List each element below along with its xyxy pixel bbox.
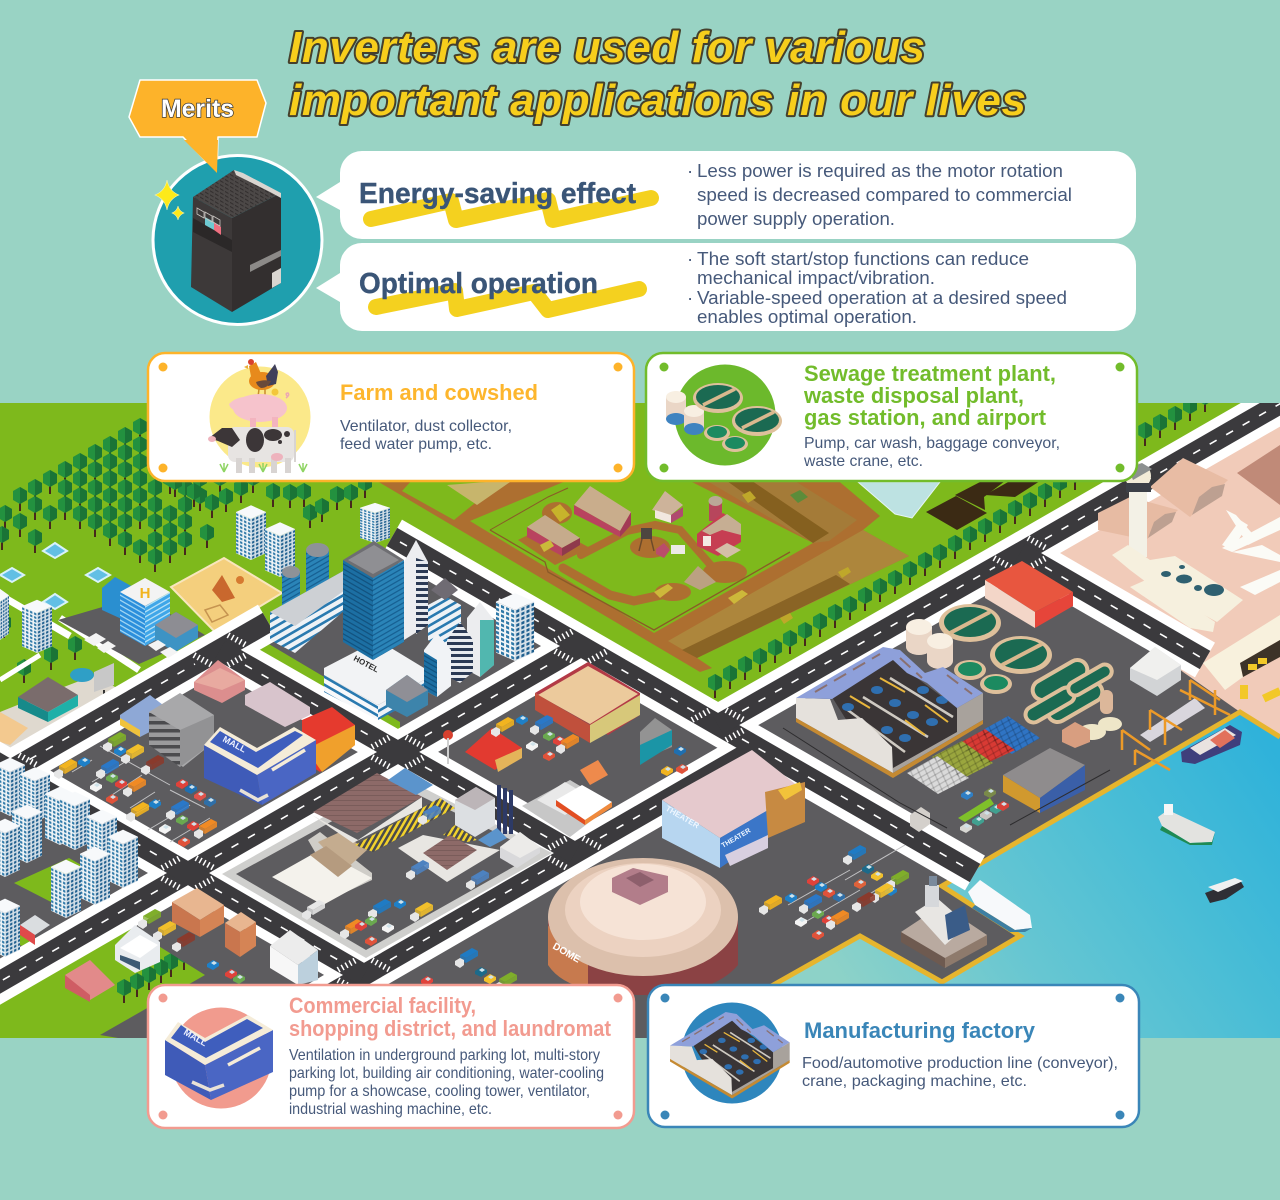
apartment towers <box>0 503 390 653</box>
teal tower <box>467 602 494 677</box>
sign <box>94 663 114 694</box>
small tanks <box>1062 690 1122 748</box>
merit panel: optimal operation: · <box>687 287 693 308</box>
theater: THEATER <box>720 827 752 850</box>
sea <box>780 715 1280 1038</box>
vehicles <box>491 717 514 737</box>
office <box>455 787 495 837</box>
dome: DOME <box>550 941 582 966</box>
grass lawn <box>14 858 80 902</box>
card: commercial facility: pump for a showcase, cooling tower, ventilator, <box>289 1083 590 1100</box>
card: sewage treatment plant <box>646 353 1137 481</box>
red building <box>985 561 1073 628</box>
playground <box>171 558 282 633</box>
port pier <box>1203 615 1280 702</box>
merit panel: optimal operation: Variable-speed operation at a desired speed <box>697 287 1067 308</box>
card: commercial facility: industrial washing machine, etc. <box>289 1101 492 1118</box>
merit panel: energy-saving effect: power supply operation. <box>697 208 895 229</box>
icon: settling tanks <box>666 383 782 452</box>
card: commercial facility: shopping district, and laundromat <box>289 1016 612 1041</box>
warehouse block <box>222 768 552 958</box>
cargo ship <box>1158 804 1215 845</box>
mall <box>204 727 316 805</box>
card: sewage treatment plant: Sewage treatment plant, <box>804 361 1056 386</box>
floor and shelves <box>272 832 372 905</box>
gantry cranes and container stacks <box>1122 680 1230 770</box>
restaurant <box>535 662 640 743</box>
red service station <box>465 728 522 772</box>
inverter emblem <box>153 140 322 324</box>
card: commercial facility: Commercial facility, <box>289 993 476 1018</box>
card: farm and cowshed: feed water pump, etc. <box>340 436 492 453</box>
small annex <box>478 828 540 868</box>
dark striped tower <box>447 622 473 683</box>
icon: grass <box>220 463 307 472</box>
icon: inverter <box>191 170 281 312</box>
downtown skyline <box>270 540 534 720</box>
title: important applications in our lives <box>289 76 1026 125</box>
settling tanks <box>939 604 1001 642</box>
ground: grass <box>0 403 1280 1038</box>
podium with hotel <box>324 648 424 720</box>
card: manufacturing factory: crane, packaging machine, etc. <box>802 1073 1027 1090</box>
merit panel: optimal operation: enables optimal operation. <box>697 306 917 327</box>
title <box>289 23 1026 125</box>
mall: MALL <box>221 734 248 755</box>
sewage plant <box>783 561 1230 833</box>
card: commercial facility: parking lot, building air conditioning, water-cooling <box>289 1065 604 1082</box>
barn 2 <box>527 515 580 556</box>
shop right <box>640 718 672 765</box>
bottom-left buildings <box>20 888 318 1002</box>
grey warehouse <box>1003 748 1085 813</box>
dome lot vehicles <box>421 845 909 992</box>
vehicles: mall lot <box>54 732 217 847</box>
vehicles <box>368 899 391 919</box>
hatched bay <box>355 798 477 852</box>
mall block buildings <box>120 660 355 805</box>
stacks <box>497 785 513 834</box>
gatehouse and parked cars <box>910 788 1009 833</box>
card: commercial facility <box>148 985 634 1128</box>
gas station block <box>443 662 688 837</box>
park shop <box>18 677 78 722</box>
merit panel: energy-saving effect: · <box>687 160 693 181</box>
airport apron <box>1060 426 1280 734</box>
merits badge <box>129 80 266 173</box>
white clinic <box>270 930 318 985</box>
port edge <box>770 709 1280 984</box>
container ship <box>1181 725 1242 764</box>
crosswalks <box>19 538 1046 990</box>
water tower <box>639 528 654 551</box>
tree rows <box>0 388 1212 1003</box>
hotel sign: HOTEL <box>352 654 380 675</box>
red shop <box>302 707 355 772</box>
hangars <box>1098 458 1228 540</box>
car stacks <box>907 716 1040 794</box>
title: Inverters are used for various <box>289 23 925 72</box>
icon: sparkles <box>155 180 184 220</box>
airplanes <box>1222 510 1280 595</box>
trucks <box>406 860 429 880</box>
hospital <box>84 577 198 658</box>
theater: THEATER <box>664 804 701 830</box>
cruise ship <box>968 880 1032 932</box>
icon: cow <box>208 427 296 473</box>
main blue tower <box>343 541 404 660</box>
merit panel: optimal operation: · <box>687 248 693 269</box>
park paths and fountains <box>0 543 139 760</box>
tail re-cover <box>184 140 218 173</box>
parking garage <box>149 693 214 767</box>
dome <box>548 858 738 995</box>
low steel building <box>386 675 428 717</box>
oxidation tanks <box>1023 656 1114 726</box>
card: farm and cowshed <box>148 353 634 481</box>
card: sewage treatment plant: Pump, car wash, baggage conveyor, <box>804 435 1060 452</box>
silo <box>708 496 722 521</box>
merit panel: optimal operation <box>316 243 1136 331</box>
card: commercial facility: Ventilation in underground parking lot, multi-story <box>289 1047 600 1064</box>
pink shops <box>194 660 245 703</box>
merit panel: energy-saving effect: Less power is required as the motor rotation <box>697 160 1063 181</box>
pink house <box>65 960 115 1002</box>
merit panel: energy-saving effect <box>316 151 1136 239</box>
fence <box>783 728 1110 828</box>
barn <box>574 486 631 537</box>
card: sewage treatment plant: gas station, and airport <box>804 405 1047 430</box>
white office <box>1130 647 1181 696</box>
sheds <box>656 543 716 590</box>
icon: mall <box>165 1015 273 1100</box>
gas station <box>522 760 612 837</box>
card: farm and cowshed: Farm and cowshed <box>340 380 538 405</box>
glass office <box>115 925 160 973</box>
roofs <box>312 773 422 843</box>
blue containers <box>388 768 433 795</box>
icon: pig <box>229 393 289 429</box>
theater <box>662 750 805 868</box>
downtown green strip <box>260 644 400 729</box>
brick offices <box>172 888 224 937</box>
cylinders <box>282 543 329 608</box>
isometric city map <box>0 388 1280 1040</box>
icon: factory <box>670 1012 790 1098</box>
greenhouse <box>858 482 940 518</box>
icon: rooster <box>244 359 278 397</box>
small ship <box>1205 878 1244 903</box>
house <box>652 491 683 523</box>
icon: mall: MALL <box>182 1027 209 1048</box>
farm land <box>372 478 1040 672</box>
airport <box>1098 458 1280 702</box>
silos <box>906 619 953 669</box>
terminal <box>1112 545 1243 632</box>
control tower <box>1125 463 1152 557</box>
sign pole <box>443 730 453 764</box>
small laundromat <box>20 915 50 945</box>
kerbs <box>0 392 1280 1035</box>
card: manufacturing factory: Food/automotive production line (conveyor), <box>802 1055 1118 1072</box>
merits badge: Merits <box>161 95 234 123</box>
hospital: H <box>140 585 150 602</box>
curved office building <box>270 570 345 653</box>
road network <box>0 392 1280 1035</box>
card: sewage treatment plant: waste crane, etc. <box>803 453 923 470</box>
lower-left apartments <box>0 758 138 957</box>
lane dashes <box>0 398 1280 1035</box>
card: manufacturing factory: Manufacturing factory <box>804 1018 1036 1043</box>
striped tower <box>428 578 461 650</box>
crop plots <box>926 481 1040 530</box>
merit panel: energy-saving effect: speed is decreased compared to commercial <box>697 184 1072 205</box>
brown roof unit <box>398 835 500 882</box>
merit panel: optimal operation: Optimal operation <box>359 268 598 300</box>
asphalt <box>0 392 1280 1035</box>
right apartment <box>496 593 534 661</box>
card: farm and cowshed: Ventilator, dust collector, <box>340 418 512 435</box>
small blue shop <box>120 695 163 737</box>
ferry terminal <box>901 876 987 968</box>
merit panel: optimal operation: mechanical impact/vibration. <box>697 267 935 288</box>
red barn <box>697 513 741 558</box>
card: sewage treatment plant: waste disposal plant, <box>803 383 1024 408</box>
farm machines <box>540 490 851 624</box>
slim tall white tower <box>404 540 428 640</box>
white-blue tower <box>424 633 451 697</box>
merit panel: optimal operation: The soft start/stop functions can reduce <box>697 248 1029 269</box>
factory <box>796 647 983 778</box>
block surfaces <box>0 553 1240 1040</box>
parking markings <box>72 746 905 925</box>
merit panel: energy-saving effect: Energy-saving effect <box>359 178 636 210</box>
card: manufacturing factory <box>648 985 1139 1127</box>
